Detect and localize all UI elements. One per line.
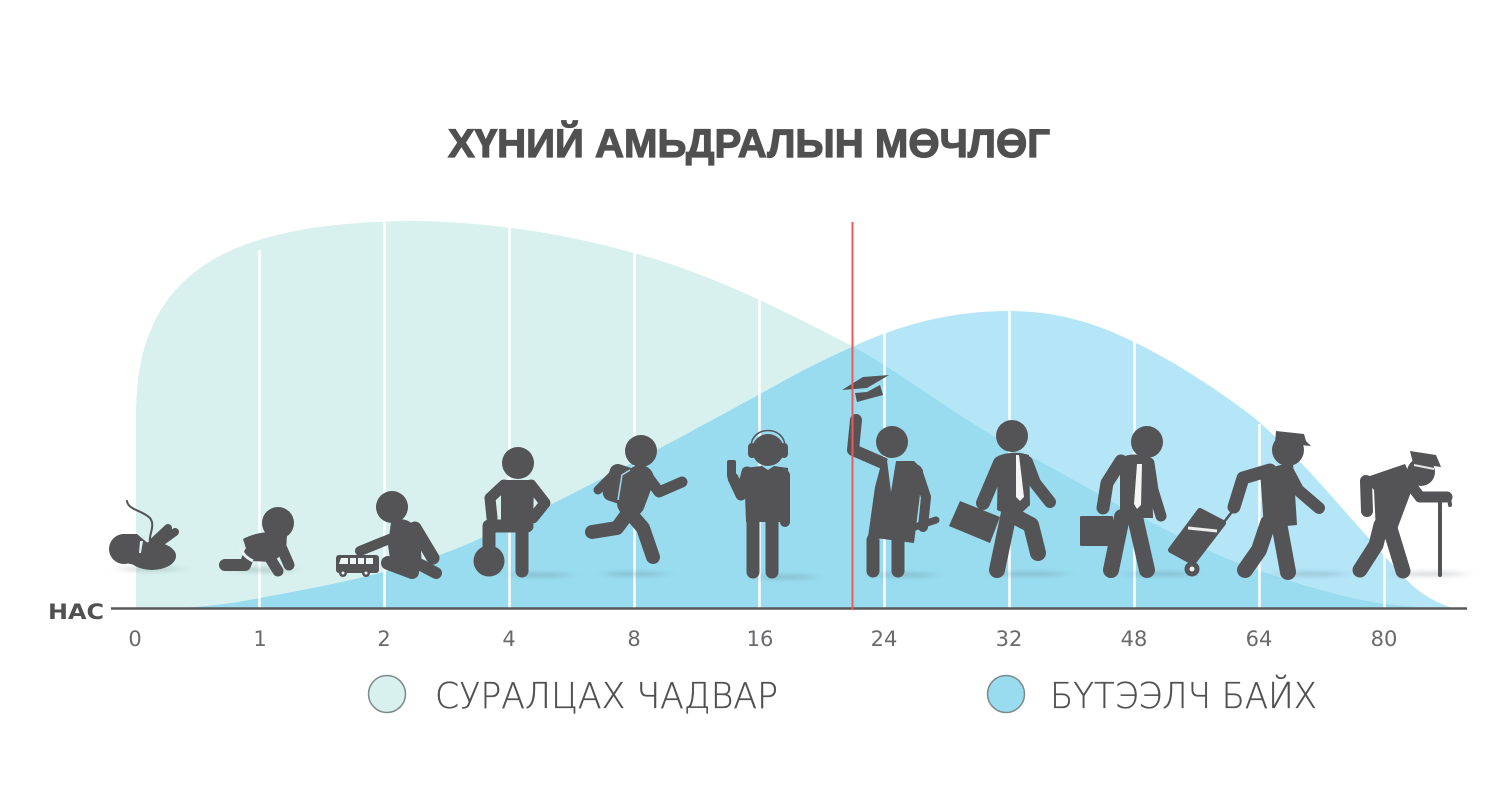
legend: learning ability: СУРАЛЦАХ ЧАДВАР: [435, 676, 778, 717]
title: ХҮНИЙ АМЬДРАЛЫН МӨЧЛӨГ: [448, 120, 1050, 166]
curve overlap: [190, 347, 1422, 608]
axis age labels: 0: [128, 627, 142, 651]
axis: [48, 600, 1467, 651]
icon: older man with rolling suitcase: [1171, 431, 1319, 576]
axis age labels: 48: [1121, 627, 1147, 651]
icon: running kid with backpack: [592, 435, 682, 557]
axis age labels: 64: [1246, 627, 1272, 651]
curve: being productive: [180, 311, 1457, 609]
area chart: learning ability and productivity curves: [136, 221, 1457, 609]
icon: sitting toddler with toy bus: [336, 491, 436, 577]
icon: graduate throwing cap: [842, 375, 936, 571]
icon: graduation cap: [842, 375, 889, 402]
axis age labels: [128, 627, 1397, 651]
curve: learning ability: [136, 221, 1457, 609]
axis age labels: 8: [627, 627, 641, 651]
axis age labels: 80: [1371, 627, 1397, 651]
icon: teenager with headphones: [727, 430, 790, 572]
red divider line: [852, 222, 854, 610]
legend: being productive: БҮТЭЭЛЧ БАЙХ: [1050, 675, 1317, 717]
axis age labels: 1: [253, 627, 267, 651]
figure shadows: [120, 566, 1465, 580]
axis age labels: 16: [747, 627, 773, 651]
icon: child with ball: [474, 447, 545, 576]
axis age labels: 32: [996, 627, 1022, 651]
axis age labels: 24: [871, 627, 897, 651]
icon: businessman with briefcase: [949, 420, 1050, 570]
axis age labels: 4: [502, 627, 516, 651]
legend: [368, 675, 1317, 717]
icon: rolling suitcase: [1171, 508, 1235, 576]
axis age labels: 2: [377, 627, 391, 651]
icon: toy bus: [336, 555, 379, 577]
icon: crawling baby: [225, 507, 294, 571]
icon: middle-aged man with briefcase: [1080, 426, 1163, 570]
icon: elderly man with cane: [1360, 451, 1450, 575]
axis title: НАС: [48, 600, 104, 624]
icon: fetus: [109, 501, 176, 570]
